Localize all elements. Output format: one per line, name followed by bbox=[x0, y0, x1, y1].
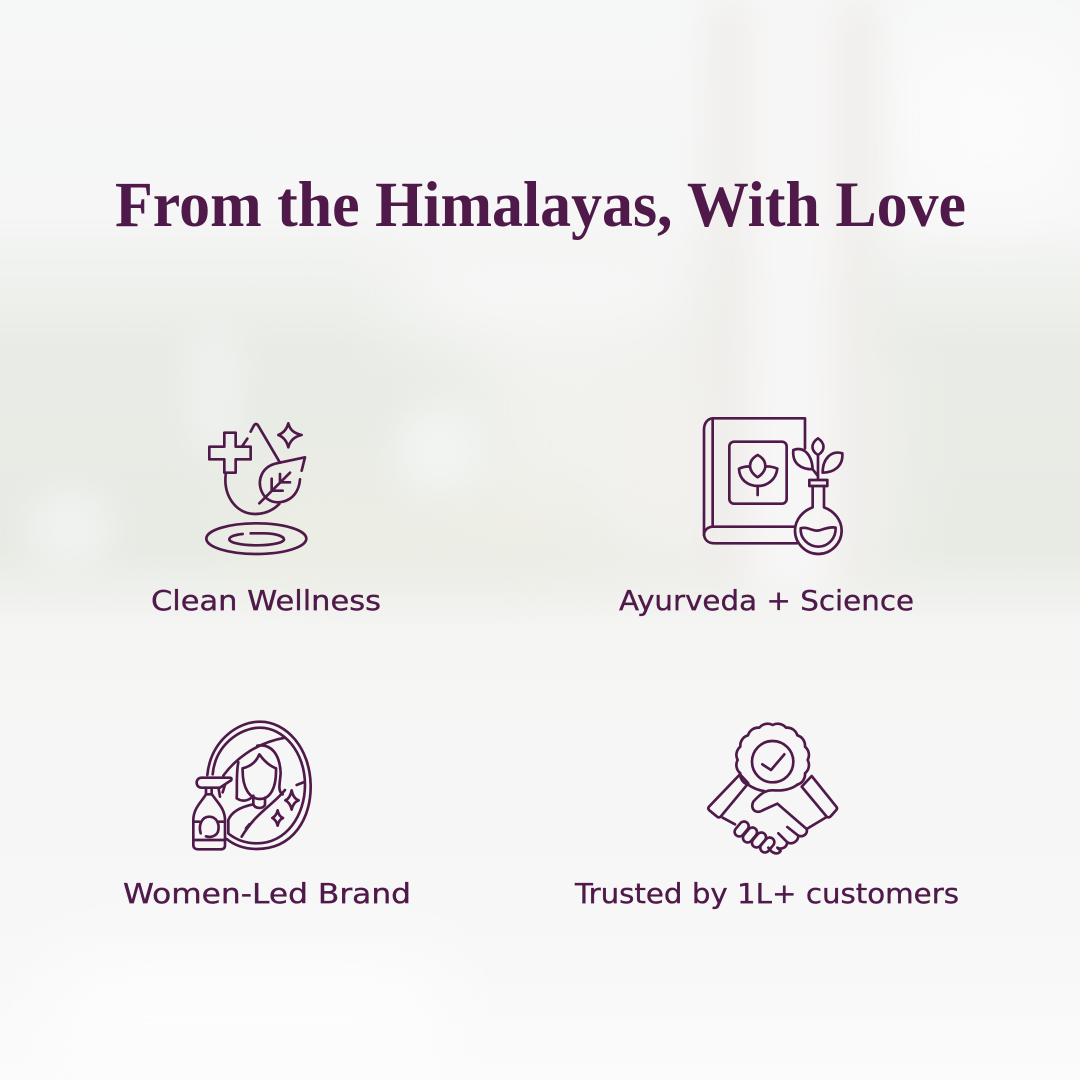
panel: ayurveda + science bbox=[619, 418, 914, 617]
panel: women-led brand bbox=[123, 722, 411, 910]
label: clean wellness: Clean Wellness bbox=[151, 585, 381, 617]
icon: clean wellness drop, leaf and plus bbox=[206, 423, 306, 554]
label: women-led brand: Women-Led Brand bbox=[123, 878, 411, 910]
panel: trusted by customers bbox=[574, 724, 959, 910]
label: ayurveda + science: Ayurveda + Science bbox=[619, 585, 914, 617]
icon: woman in mirror with spray bottle bbox=[193, 722, 311, 849]
icon: badge and handshake bbox=[708, 724, 837, 854]
label: trusted by 1L+ customers: Trusted by 1L+ customers bbox=[574, 878, 959, 910]
title: From the Himalayas, With Love bbox=[115, 169, 966, 241]
panel: clean wellness bbox=[151, 423, 381, 617]
icon: book and flask bbox=[704, 418, 842, 554]
